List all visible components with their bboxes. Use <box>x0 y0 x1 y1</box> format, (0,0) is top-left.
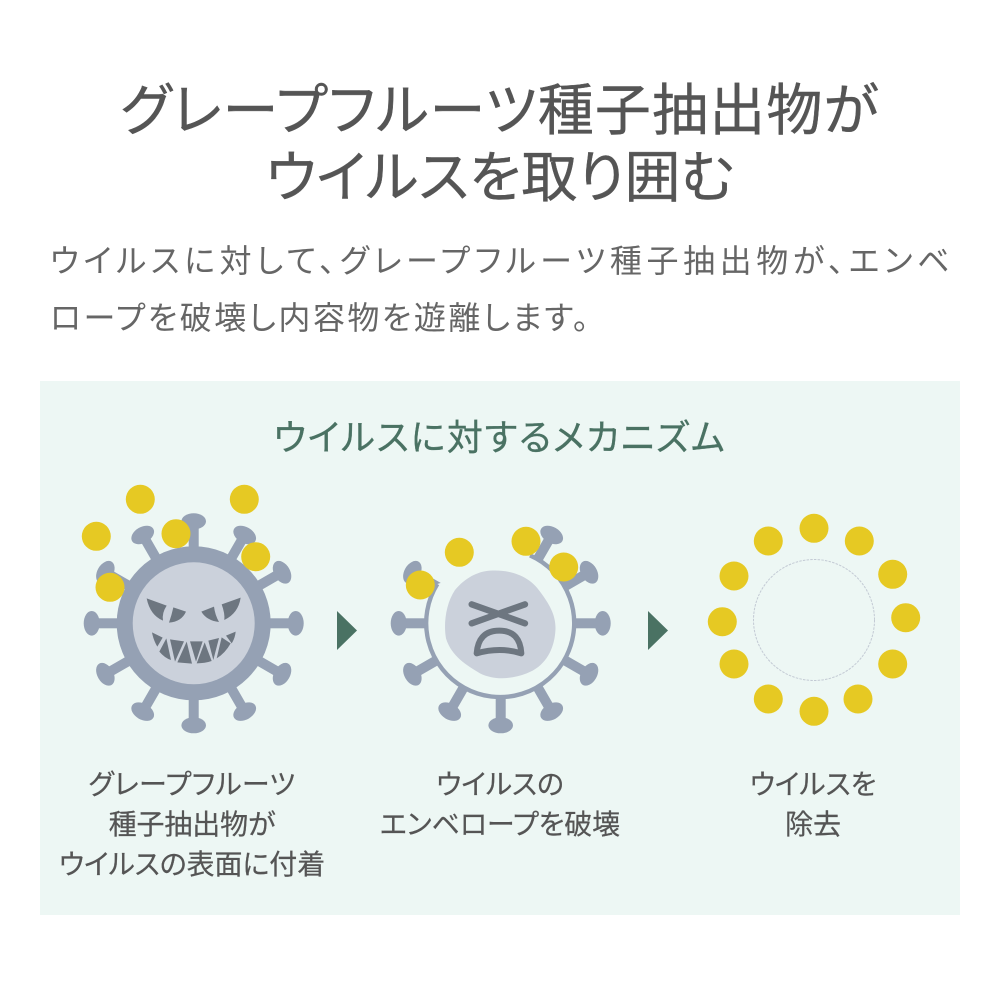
label: step 2: ウイルスの <box>436 769 564 800</box>
title: グレープフルーツ種子抽出物が <box>120 79 880 142</box>
arrow 1 <box>337 611 357 650</box>
label: step 1: 種子抽出物が <box>109 809 275 840</box>
label: step 1 <box>59 769 325 880</box>
label: step 3 <box>750 769 876 840</box>
label: step 1: グレープフルーツ <box>88 769 296 800</box>
label: step 2 <box>380 769 620 840</box>
body text: ウイルスに対して、グレープフルーツ種子抽出物が、エンベ <box>50 243 954 279</box>
body text: ロープを破壊し内容物を遊離します。 <box>50 300 591 336</box>
label: step 3: 除去 <box>785 809 841 840</box>
panel: mechanism background <box>40 381 960 915</box>
virus 1: attached extract <box>82 485 304 733</box>
virus 3: removed <box>708 514 920 726</box>
panel heading: ウイルスに対するメカニズム <box>274 417 726 458</box>
title: ウイルスを取り囲む <box>266 146 734 209</box>
title <box>120 79 880 209</box>
body text <box>50 243 954 336</box>
virus 2: envelope destroyed <box>391 522 611 733</box>
label: step 2: エンベロープを破壊 <box>380 809 620 840</box>
label: step 1: ウイルスの表面に付着 <box>59 849 325 880</box>
label: step 3: ウイルスを <box>750 769 876 800</box>
arrow 2 <box>648 611 668 650</box>
